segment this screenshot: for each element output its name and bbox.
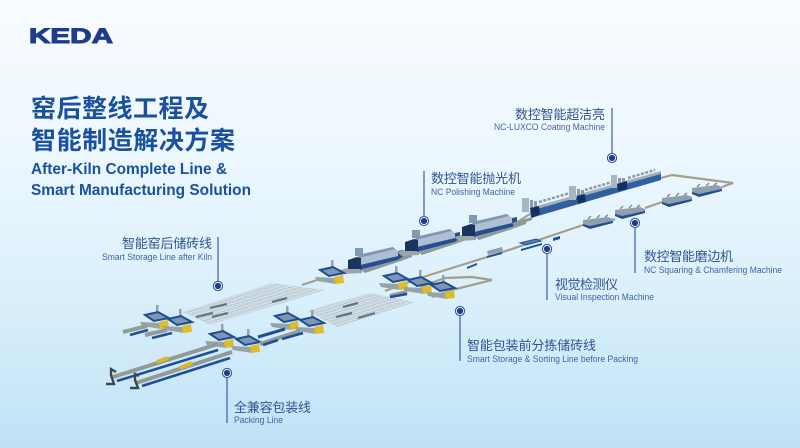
robots (106, 369, 139, 388)
logo: KEDA: KEDA (29, 25, 113, 48)
inspection machines (467, 263, 477, 269)
callout: smart storage and sorting line before packing (455, 306, 638, 364)
callout: NC-LUXCO coating machine: 数控智能超洁亮 (515, 107, 605, 122)
packing and storage discharge lines (113, 292, 407, 386)
callout: visual inspection machine: 视觉检测仪 (555, 277, 618, 292)
callout: NC squaring and chamfering machine: 数控智能磨边机 (644, 249, 733, 264)
callout: packing line: Packing Line (234, 415, 283, 425)
equipment: production line illustration (106, 170, 733, 388)
callout: visual inspection machine: Visual Inspection Machine (555, 292, 654, 302)
callout: smart storage and sorting line before packing: 智能包装前分拣储砖线 (467, 338, 596, 353)
callout: NC polishing machine: 数控智能抛光机 (431, 171, 521, 186)
squaring machines (583, 215, 613, 229)
polishing machines (340, 247, 412, 274)
conveyors (302, 175, 733, 297)
callout: NC polishing machine: NC Polishing Machine (431, 187, 515, 197)
title: After-Kiln Complete Line & (31, 161, 227, 178)
callout: NC squaring and chamfering machine (630, 218, 782, 275)
storage grid before packing (308, 293, 415, 327)
coating machines (512, 170, 661, 226)
storage grid after kiln (183, 283, 325, 325)
stations (315, 260, 344, 284)
callout: smart storage line after kiln: Smart Storage Line after Kiln (102, 252, 212, 262)
callout: NC-LUXCO coating machine (494, 107, 617, 163)
callout: smart storage line after kiln (102, 236, 223, 291)
callout: smart storage line after kiln: 智能窑后储砖线 (122, 236, 212, 251)
callout: packing line: 全兼容包装线 (234, 400, 311, 415)
title (31, 95, 251, 199)
callout: NC squaring and chamfering machine: NC Squaring & Chamfering Machine (644, 265, 782, 275)
callout: NC polishing machine (419, 171, 521, 226)
callout: NC-LUXCO coating machine: NC-LUXCO Coating Machine (494, 122, 605, 132)
title: 智能制造解决方案 (31, 126, 235, 155)
title: Smart Manufacturing Solution (31, 182, 251, 199)
title: 窑后整线工程及 (31, 95, 209, 123)
callout: packing line (222, 368, 311, 425)
callout: smart storage and sorting line before packing: Smart Storage & Sorting Line before Packing (467, 354, 638, 364)
callout: visual inspection machine (542, 244, 654, 302)
